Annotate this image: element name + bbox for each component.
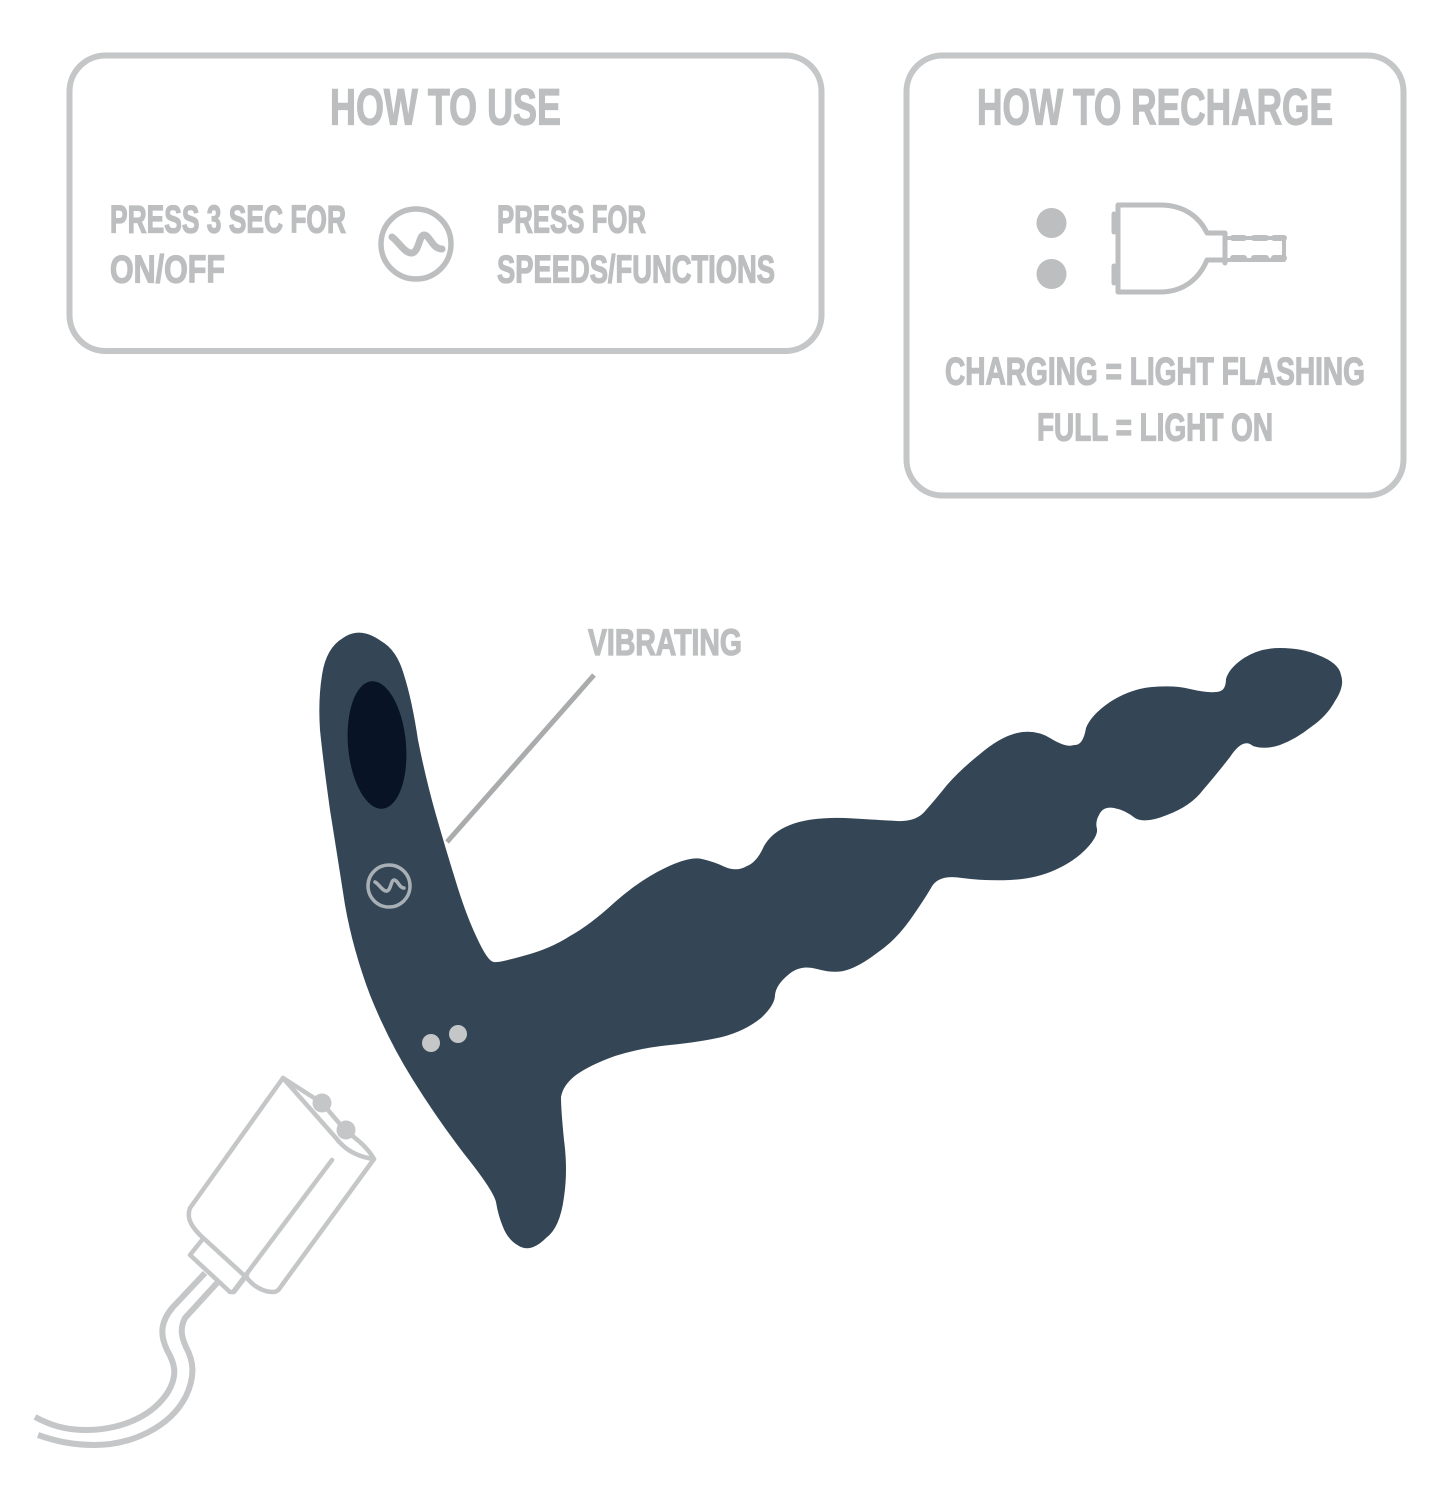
heading: how to use: HOW TO USE: [330, 78, 561, 136]
text block: press for speeds/functions: [497, 198, 775, 292]
text block: press 3 sec for on/off: PRESS 3 SEC FOR: [110, 198, 346, 242]
panel: how to use: [70, 56, 822, 351]
panel border: how to use: [70, 56, 822, 351]
charging contacts on device: [422, 1025, 467, 1052]
icon: power button with wave: [381, 209, 451, 279]
device body: [319, 633, 1342, 1248]
text block: press 3 sec for on/off: ON/OFF: [110, 248, 225, 292]
leader line: vibrating: [447, 675, 594, 842]
charger head: [189, 1078, 374, 1292]
charger contacts: [312, 1094, 356, 1140]
panel: how to recharge: [906, 56, 1404, 496]
icon: charging plug: [1114, 205, 1284, 292]
label: vibrating: VIBRATING: [588, 621, 742, 663]
text block: press for speeds/functions: PRESS FOR: [497, 198, 646, 242]
text block: press for speeds/functions: SPEEDS/FUNCTIONS: [497, 248, 775, 292]
text block: charging status: [945, 350, 1365, 450]
vibrating motor area: [343, 679, 411, 811]
charger and cable: [35, 1078, 374, 1445]
icon: charging contacts: [1036, 208, 1066, 289]
icon: button on device: [368, 865, 410, 907]
text block: press 3 sec for on/off: [110, 198, 346, 292]
cable: [35, 1273, 217, 1445]
product silhouette: [319, 633, 1342, 1248]
panel border: how to recharge: [906, 56, 1404, 496]
text block: charging status: FULL = LIGHT ON: [1037, 406, 1273, 450]
